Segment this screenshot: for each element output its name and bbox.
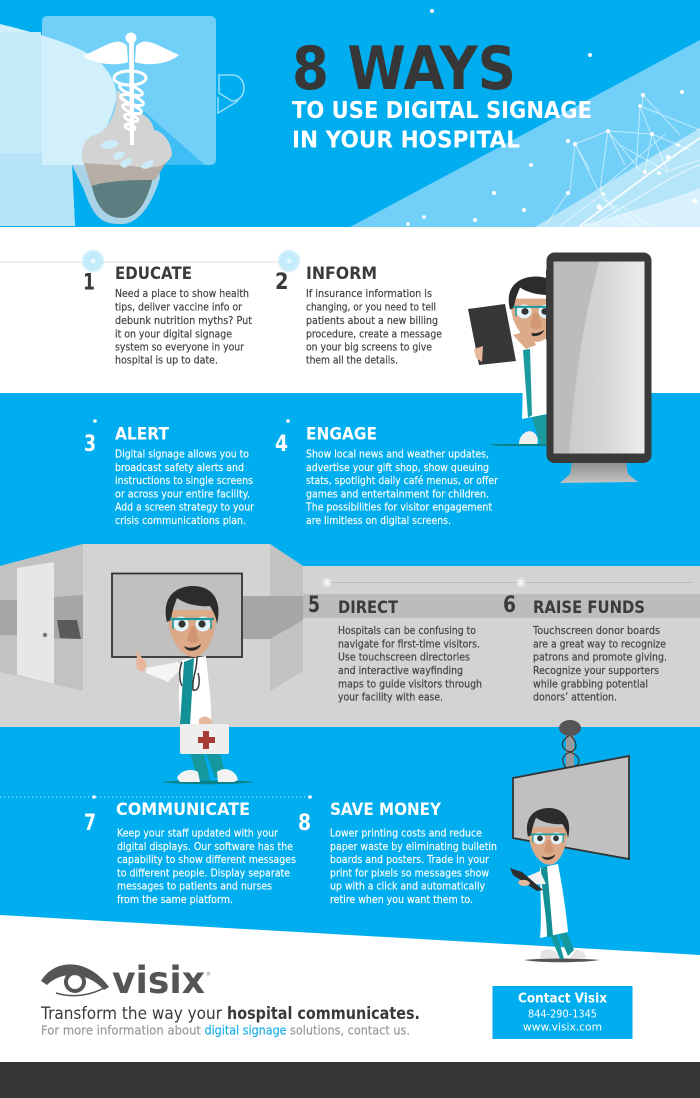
step 6: raise funds: RAISE FUNDS [533,598,645,618]
title: 8 WAYS [292,34,516,104]
divider with nodes [321,576,692,588]
kiosk screen [554,262,644,454]
step 4: engage: stats, spotlight daily café menus, or offer [306,474,498,487]
contact box: Contact Visix [518,992,608,1007]
arm and sleeve [0,24,116,226]
step 3: alert: 3 [84,432,96,457]
step 4: engage: 4 [275,432,288,457]
white section background [0,227,700,393]
step 6: raise funds: patrons and promote giving. [533,651,667,664]
stripe band right [243,596,303,639]
title: IN YOUR HOSPITAL [292,128,520,154]
step 1: educate: debunk nutrition myths? Put [115,314,253,327]
step 5: direct [308,593,482,704]
left wall [0,544,83,691]
step 5: direct: Use touchscreen directories [338,651,470,664]
step 3: alert [84,419,254,527]
step 1: educate: Need a place to show health [115,287,249,300]
step 7: communicate: capability to show different messages [117,853,296,866]
title: TO USE DIGITAL SIGNAGE [292,98,592,124]
step 7: communicate: Keep your staff updated with your [117,826,278,840]
step 3: alert: crisis communications plan. [115,514,246,527]
icon: D mark [218,75,244,113]
icon: caduceus [83,32,179,145]
visix logo: visix [112,959,205,1002]
stripe band far wall [303,594,700,618]
step 4: engage [275,419,498,527]
step 8: save money: 8 [298,811,311,836]
step 6: raise funds [503,593,667,704]
contact box: www.visix.com [523,1021,602,1034]
icon: eye [41,964,109,996]
step 3: alert: instructions to single screens [115,474,253,487]
blue lower section background [0,720,700,955]
title [292,34,592,154]
step 8: save money: retire when you want them to. [330,893,473,906]
stripe band left [0,595,83,639]
step 6: raise funds: Recognize your supporters [533,664,659,677]
step 8: save money: Lower printing costs and reduce [330,826,482,840]
step 3: alert: or across your entire facility. [115,487,250,500]
step 4: engage: The possibilities for visitor engagement [305,500,493,514]
step 7: communicate [84,800,296,906]
step 8: save money: print for pixels so messages show [330,866,489,879]
step 2: inform [275,264,442,366]
doctor with first aid kit [136,586,255,784]
step 8: save money: boards and posters. Trade in your [330,853,489,866]
tagline [40,1004,420,1024]
hand shadow on panel [140,108,205,165]
step 2: inform: procedure, create a message [306,327,442,340]
step 5: direct: 5 [308,593,320,618]
network graphic [545,95,700,226]
step 1: educate: tips, deliver vaccine info or [115,300,242,314]
step 1: educate: hospital is up to date. [115,354,218,366]
step 6: raise funds: are a great way to recognize [533,637,666,650]
step 2: inform: patients about a new billing [306,314,438,327]
step 5: direct: maps to guide visitors through [338,677,482,690]
step 8: save money [298,800,497,906]
step 6: raise funds: Touchscreen donor boards [532,624,660,637]
step 2: inform: them all the details. [306,354,398,366]
step 3: alert: broadcast safety alerts and [115,461,244,474]
contact box [492,986,632,1039]
contact line: solutions, contact us. [290,1022,410,1038]
step 7: communicate: to different people. Display separate [117,866,290,879]
decorative dots [406,9,698,226]
step 2: inform: on your big screens to give [306,341,432,354]
step 5: direct: Hospitals can be confusing to [338,624,476,637]
tagline: hospital communicates. [227,1004,420,1024]
step 7: communicate: COMMUNICATE [116,800,250,820]
step 5: direct: and interactive wayfinding [338,664,463,677]
step 5: direct: DIRECT [338,598,398,618]
step 1: educate: it on your digital signage [115,327,232,340]
step 8: save money: SAVE MONEY [330,800,442,820]
step 3: alert: ALERT [115,424,169,444]
step 8: save money: up with a click and automatically [330,880,485,892]
hand pressing the screen [72,90,172,224]
step 7: communicate: 7 [84,811,96,836]
right wall [270,544,303,691]
hanging screen with doctor [510,720,629,962]
step 2: inform: INFORM [306,264,377,284]
step 8: save money: paper waste by eliminating bulletin [330,840,497,853]
kiosk with peeking doctor [468,252,652,483]
panel: hallway [0,544,700,784]
contact line: For more information about [41,1022,201,1038]
step 5: direct: navigate for first-time visitors. [338,637,480,650]
door [17,562,54,684]
wall screen [112,574,242,657]
step 3: alert: Digital signage allows you to [115,448,249,460]
doctor holding tablet [468,270,562,446]
timeline with glowing nodes [0,249,301,273]
visix logo [41,959,211,1002]
tagline: Transform the way your [40,1004,222,1024]
step 2: inform: 2 [275,270,288,295]
step 2: inform: changing, or you need to tell [306,300,436,314]
step 7: communicate: from the same platform. [117,893,233,906]
step 2: inform: If insurance information is [306,287,432,300]
step 4: engage: are limitless on digital screens. [306,514,451,527]
contact box: 844-290-1345 [528,1008,597,1020]
step 4: engage: Show local news and weather updates, [306,448,489,460]
icon: touch screen panel [42,16,216,165]
step 7: communicate: digital displays. Our software has the [117,840,293,853]
header banner [0,0,700,227]
step 4: engage: advertise your gift shop, show queuing [306,461,489,474]
step 5: direct: your facility with ease. [338,690,443,704]
step 6: raise funds: donors’ attention. [533,690,617,704]
step 7: communicate: messages to patients and nurses [117,880,272,892]
kiosk stand [560,462,638,483]
contact line: digital signage [204,1022,287,1038]
doctor with clipboard [510,808,600,962]
step 1: educate: 1 [83,270,95,296]
wall tablet [57,620,81,639]
step 1: educate: system so everyone in your [115,341,244,354]
blue section background [0,393,700,593]
contact line [41,1022,410,1038]
ceiling mount [559,720,581,769]
step 1: educate: EDUCATE [115,264,192,284]
step 6: raise funds: while grabbing potential [533,677,648,690]
kiosk frame [546,252,652,463]
visix logo: ® [206,971,211,978]
step 1: educate [83,264,253,366]
step 4: engage: games and entertainment for children. [306,487,489,500]
step 3: alert: Add a screen strategy to your [115,500,254,514]
step 6: raise funds: 6 [503,593,516,618]
step 4: engage: ENGAGE [306,424,377,444]
hanging screen [513,756,629,859]
dotted divider [0,795,312,799]
footer bar [0,1062,700,1098]
